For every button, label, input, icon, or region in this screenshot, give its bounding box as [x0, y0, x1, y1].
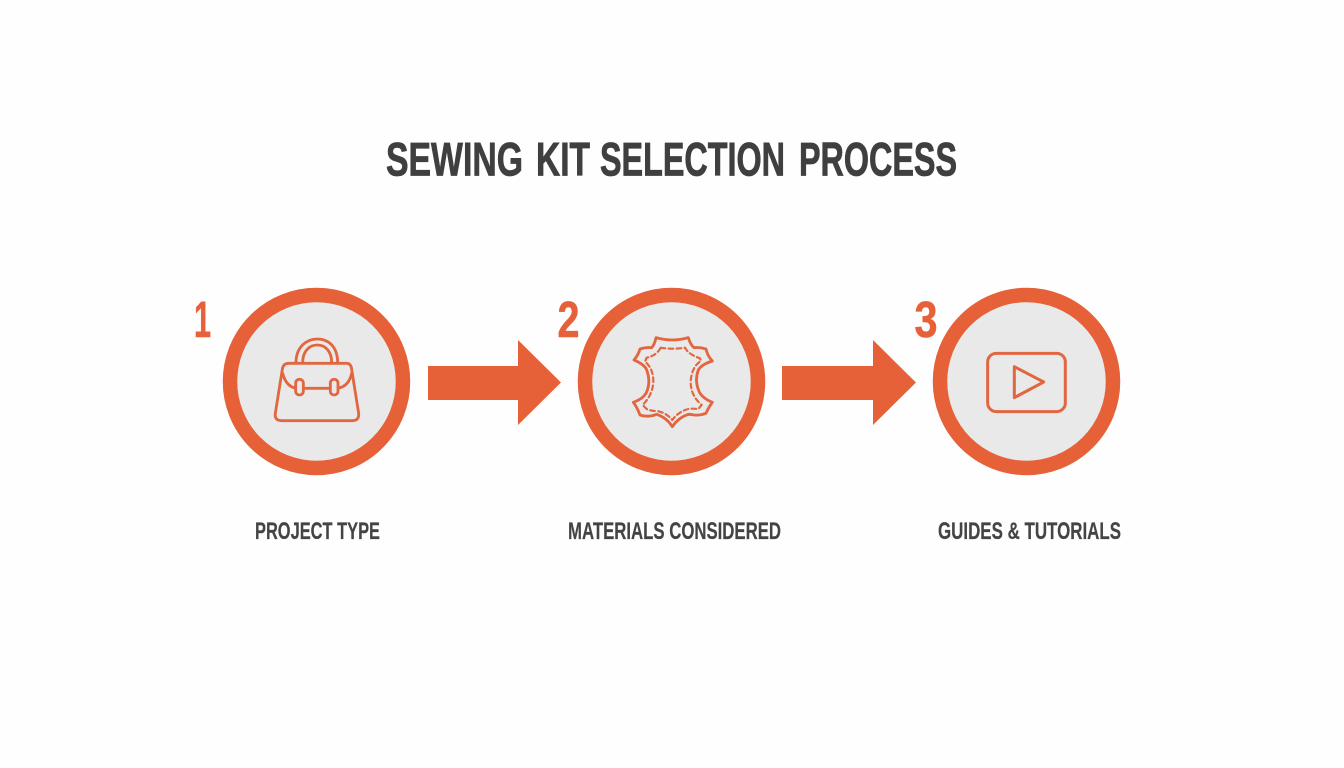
arrow: step 2 to step 3 — [782, 340, 916, 425]
step number 1: 1 — [194, 291, 211, 348]
step number 3: 3 — [914, 291, 938, 348]
step 2 label: MATERIALS CONSIDERED — [568, 518, 781, 545]
icon: handbag — [275, 339, 359, 421]
arrow: step 1 to step 2 — [428, 340, 561, 425]
panel: step 3 guides and tutorials — [914, 291, 1121, 545]
title: SELECTION — [600, 132, 785, 186]
panel: step 1 project type — [194, 291, 403, 545]
step 2 circle — [585, 295, 758, 468]
icon: leather hide with stitching — [633, 338, 712, 427]
title: PROCESS — [799, 132, 957, 186]
title — [386, 132, 957, 186]
step 1 circle — [230, 295, 403, 468]
step 1 label: PROJECT TYPE — [255, 518, 380, 545]
step number 2: 2 — [558, 291, 580, 348]
title: SEWING — [386, 132, 523, 186]
title: KIT — [536, 132, 590, 186]
step 3 circle — [940, 295, 1113, 468]
step 3 label: GUIDES & TUTORIALS — [938, 518, 1121, 545]
panel: step 2 materials considered — [558, 291, 781, 545]
icon: video play — [988, 353, 1065, 412]
